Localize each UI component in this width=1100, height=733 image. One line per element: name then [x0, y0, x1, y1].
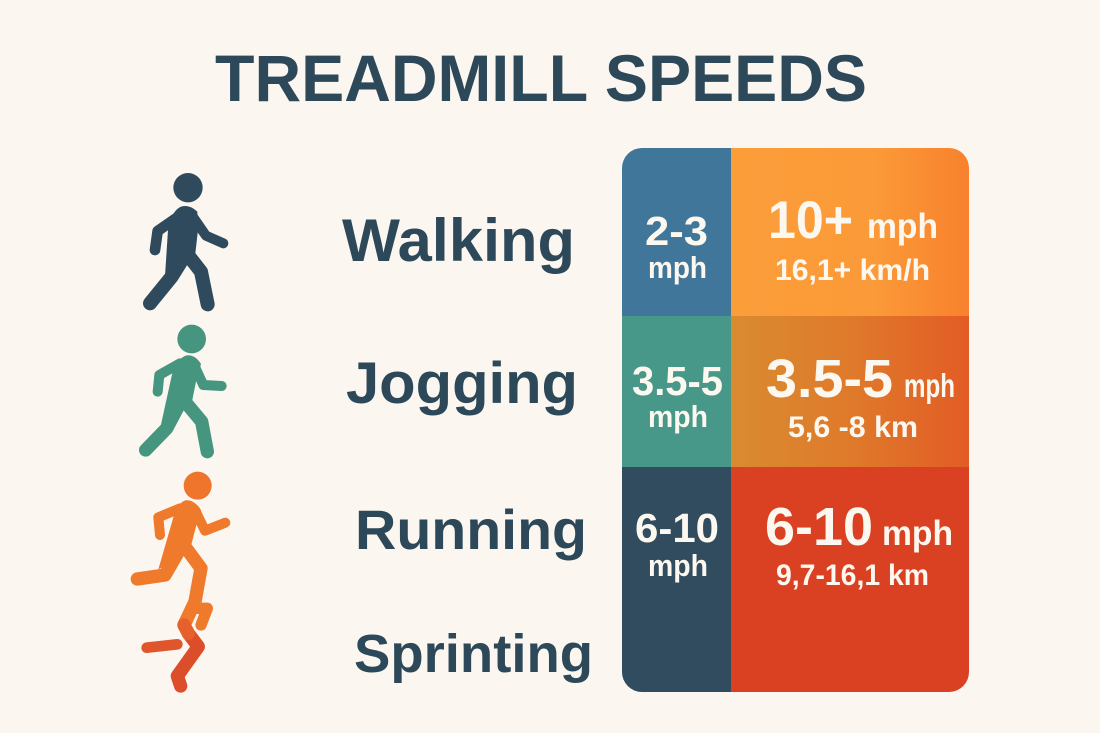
icon: jogging figure	[146, 325, 222, 452]
text: 6-10 mph right	[765, 497, 953, 592]
text: 3.5-5 mph right: mph	[904, 367, 955, 404]
label: walking: Walking	[342, 207, 575, 274]
text: 3.5-5 mph left: 3.5-5	[632, 358, 723, 404]
label: sprinting: Sprinting	[354, 624, 593, 684]
text: 2-3 mph	[645, 208, 708, 285]
speed table	[622, 148, 969, 692]
text: 6-10 mph right: mph	[882, 514, 953, 553]
text: 6-10 mph left: 6-10	[635, 505, 719, 551]
text: 3.5-5 mph left	[632, 358, 723, 434]
text: 3.5-5 mph right	[766, 349, 955, 444]
text: 6-10 mph left: mph	[648, 548, 708, 583]
cell: bottom right background	[731, 467, 969, 692]
cell: jogging mph background	[622, 316, 731, 467]
text: 10+ mph: mph	[867, 207, 938, 246]
icon: walking figure	[150, 173, 223, 304]
text: 3.5-5 mph left: mph	[648, 399, 708, 434]
text: 2-3 mph: 2-3	[645, 208, 708, 254]
text: 6-10 mph left	[635, 505, 719, 583]
text: 3.5-5 mph right: 5,6 -8 km	[788, 411, 918, 444]
cell: running mph background	[622, 467, 731, 692]
title: TREADMILL SPEEDS	[215, 41, 867, 115]
icon: running and sprinting figure	[137, 472, 225, 686]
text: 2-3 mph: mph	[648, 250, 707, 285]
cell: walking mph background	[622, 148, 731, 316]
label: running: Running	[355, 498, 587, 561]
cell: top right background	[731, 148, 969, 316]
text: 10+ mph: 16,1+ km/h	[775, 254, 930, 287]
cell: middle right background	[731, 316, 969, 467]
text: 6-10 mph right: 9,7-16,1 km	[776, 559, 929, 592]
text: 10+ mph: 10+	[768, 191, 853, 250]
text: 10+ mph	[768, 191, 938, 287]
text: 3.5-5 mph right: 3.5-5	[766, 349, 893, 409]
text: 6-10 mph right: 6-10	[765, 497, 873, 557]
label: jogging: Jogging	[346, 351, 578, 416]
